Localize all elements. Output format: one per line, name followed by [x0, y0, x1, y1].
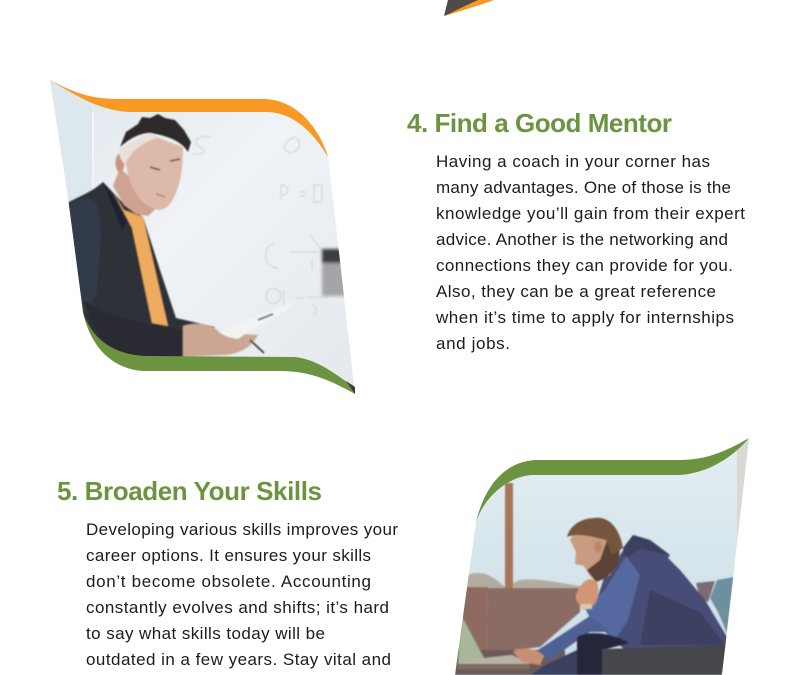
- neck: [113, 168, 160, 216]
- text block: mentor: Also, they can be a great reference: [436, 282, 716, 301]
- text block: mentor: many advantages. One of those is the: [436, 178, 731, 197]
- tablet: [220, 304, 292, 340]
- green band: [83, 312, 355, 394]
- text block: mentor: knowledge you’ll gain from their expert: [436, 204, 745, 223]
- text block: skills: to say what skills today will be: [86, 624, 325, 643]
- typing hand: [513, 649, 544, 665]
- previous photo fragment: [444, 0, 494, 16]
- text block: skills: constantly evolves and shifts; it’s hard: [86, 598, 389, 617]
- arm to laptop: [538, 616, 610, 661]
- laptop: [458, 615, 484, 664]
- text block: mentor: and jobs.: [436, 334, 510, 353]
- shirt: [112, 190, 168, 326]
- hand at chin: [576, 579, 598, 610]
- text block: skills: Developing various skills improves your: [86, 520, 398, 539]
- sofa: [458, 587, 488, 653]
- man: [67, 114, 296, 358]
- post: [505, 483, 513, 588]
- text block: mentor: Having a coach in your corner has: [436, 152, 710, 171]
- whiteboard marks: [192, 137, 330, 314]
- text block: mentor: [435, 152, 745, 353]
- photo: man on sofa with laptop: [450, 435, 755, 675]
- text block: mentor: connections they can provide for you.: [436, 256, 733, 275]
- text block: skills: outdated in a few years. Stay vital and: [86, 650, 391, 669]
- face: [124, 135, 183, 210]
- text block: mentor: advice. Another is the networking and: [436, 230, 728, 249]
- hand: [183, 324, 258, 357]
- armchair: [602, 645, 727, 675]
- jacket: [67, 182, 215, 358]
- head: [570, 529, 620, 582]
- text block: skills: [86, 520, 398, 669]
- blurred object: [322, 249, 348, 296]
- pants: [577, 633, 630, 675]
- orange band: [50, 80, 328, 157]
- hoodie body: [595, 535, 727, 650]
- hair: [120, 114, 191, 152]
- green band: [476, 438, 749, 522]
- text block: skills: don’t become obsolete. Accounting: [86, 572, 371, 591]
- arm to chin: [585, 556, 640, 640]
- hills: [467, 572, 580, 589]
- photo: man with tablet at whiteboard: [45, 75, 360, 400]
- text block: skills: career options. It ensures your skills: [86, 546, 371, 565]
- side fade: [120, 133, 160, 165]
- text block: mentor: when it’s time to apply for internships: [435, 308, 734, 327]
- cushions: [696, 581, 715, 602]
- heading: 5. Broaden Your Skills: 5. Broaden Your Skills: [57, 476, 322, 506]
- heading: 4. Find a Good Mentor: 4. Find a Good Mentor: [407, 108, 672, 138]
